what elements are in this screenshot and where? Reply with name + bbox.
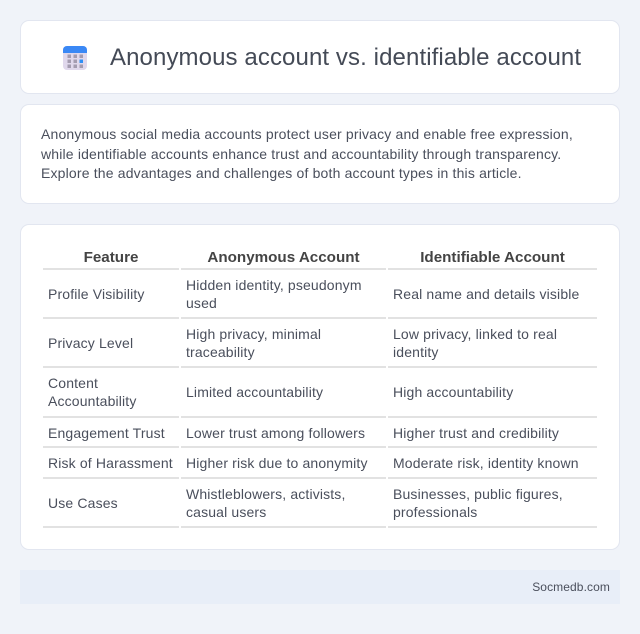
cell: Whistleblowers, activists, bbox=[186, 486, 346, 502]
footer text: Socmedb.com bbox=[532, 580, 610, 594]
cell bbox=[186, 277, 362, 311]
cell: Lower trust among followers bbox=[186, 425, 365, 441]
row: Content Accountability: Content bbox=[48, 375, 98, 391]
cell: High accountability bbox=[393, 384, 513, 400]
cell: Higher trust and credibility bbox=[393, 425, 559, 441]
icon: calendar bbox=[63, 46, 87, 70]
cell: Real name and details visible bbox=[393, 286, 579, 302]
row: Risk of Harassment: Risk of Harassment bbox=[48, 455, 173, 471]
cell: professionals bbox=[393, 504, 477, 520]
cell: Businesses, public figures, bbox=[393, 486, 563, 502]
title: Anonymous account vs. identifiable account bbox=[110, 44, 581, 71]
cell bbox=[186, 326, 321, 360]
cell: identity bbox=[393, 344, 439, 360]
cell bbox=[393, 326, 557, 360]
row: Use Cases: Use Cases bbox=[48, 495, 118, 511]
panel: title card bbox=[20, 20, 620, 94]
cell: High privacy, minimal bbox=[186, 326, 321, 342]
cell: Higher risk due to anonymity bbox=[186, 455, 368, 471]
cell bbox=[393, 486, 563, 520]
intro text bbox=[41, 126, 573, 181]
panel: introduction bbox=[20, 104, 620, 204]
cell: Hidden identity, pseudonym bbox=[186, 277, 362, 293]
cell: Low privacy, linked to real bbox=[393, 326, 557, 342]
cell: used bbox=[186, 295, 217, 311]
table header: Anonymous Account: Anonymous Account bbox=[207, 249, 360, 266]
row: Content Accountability: Accountability bbox=[48, 393, 136, 409]
row: Content Accountability bbox=[48, 375, 136, 409]
panel: comparison table bbox=[20, 224, 620, 550]
cell: casual users bbox=[186, 504, 266, 520]
cell: Limited accountability bbox=[186, 384, 323, 400]
intro text: while identifiable accounts enhance trust and accountability through transparency. bbox=[41, 146, 561, 162]
table header: Feature: Feature bbox=[84, 249, 138, 266]
row: Privacy Level: Privacy Level bbox=[48, 335, 133, 351]
cell: Moderate risk, identity known bbox=[393, 455, 579, 471]
row: Engagement Trust: Engagement Trust bbox=[48, 425, 165, 441]
table header: Identifiable Account: Identifiable Account bbox=[420, 249, 565, 266]
cell: traceability bbox=[186, 344, 255, 360]
intro text: Explore the advantages and challenges of both account types in this article. bbox=[41, 165, 522, 181]
intro text: Anonymous social media accounts protect user privacy and enable free expression, bbox=[41, 126, 573, 142]
footer bar bbox=[20, 570, 620, 604]
row: Profile Visibility: Profile Visibility bbox=[48, 286, 145, 302]
cell bbox=[186, 486, 346, 520]
